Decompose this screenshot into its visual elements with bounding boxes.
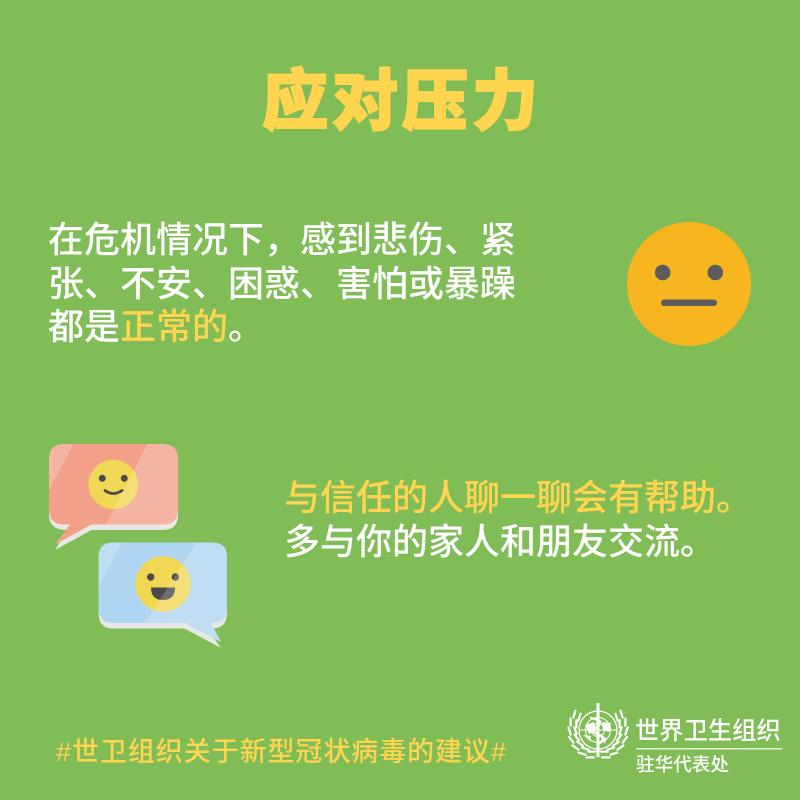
text block: stress is normal [48,219,516,347]
icon: neutral face [627,222,751,346]
logo: organisation name: 世界卫生组织 [635,718,781,745]
logo: organisation name [635,718,782,775]
text block: talking helps: 与信任的人聊一聊会有帮助。 [284,477,752,518]
logo: WHO emblem [568,703,628,759]
text block: stress is normal: 都是正常的。 [48,306,264,347]
text block: stress is normal: 在危机情况下，感到悲伤、紧 [48,219,516,260]
title: 应对压力 [262,64,538,138]
icon: red speech bubble [49,444,178,550]
hashtag: #世卫组织关于新型冠状病毒的建议# [56,737,506,767]
text block: talking helps [284,477,752,562]
icon: blue speech bubble [98,542,227,648]
text block: stress is normal: 张、不安、困惑、害怕或暴躁 [48,263,516,304]
text block: talking helps: 多与你的家人和朋友交流。 [284,521,716,562]
logo: organisation name: 驻华代表处 [636,754,729,775]
